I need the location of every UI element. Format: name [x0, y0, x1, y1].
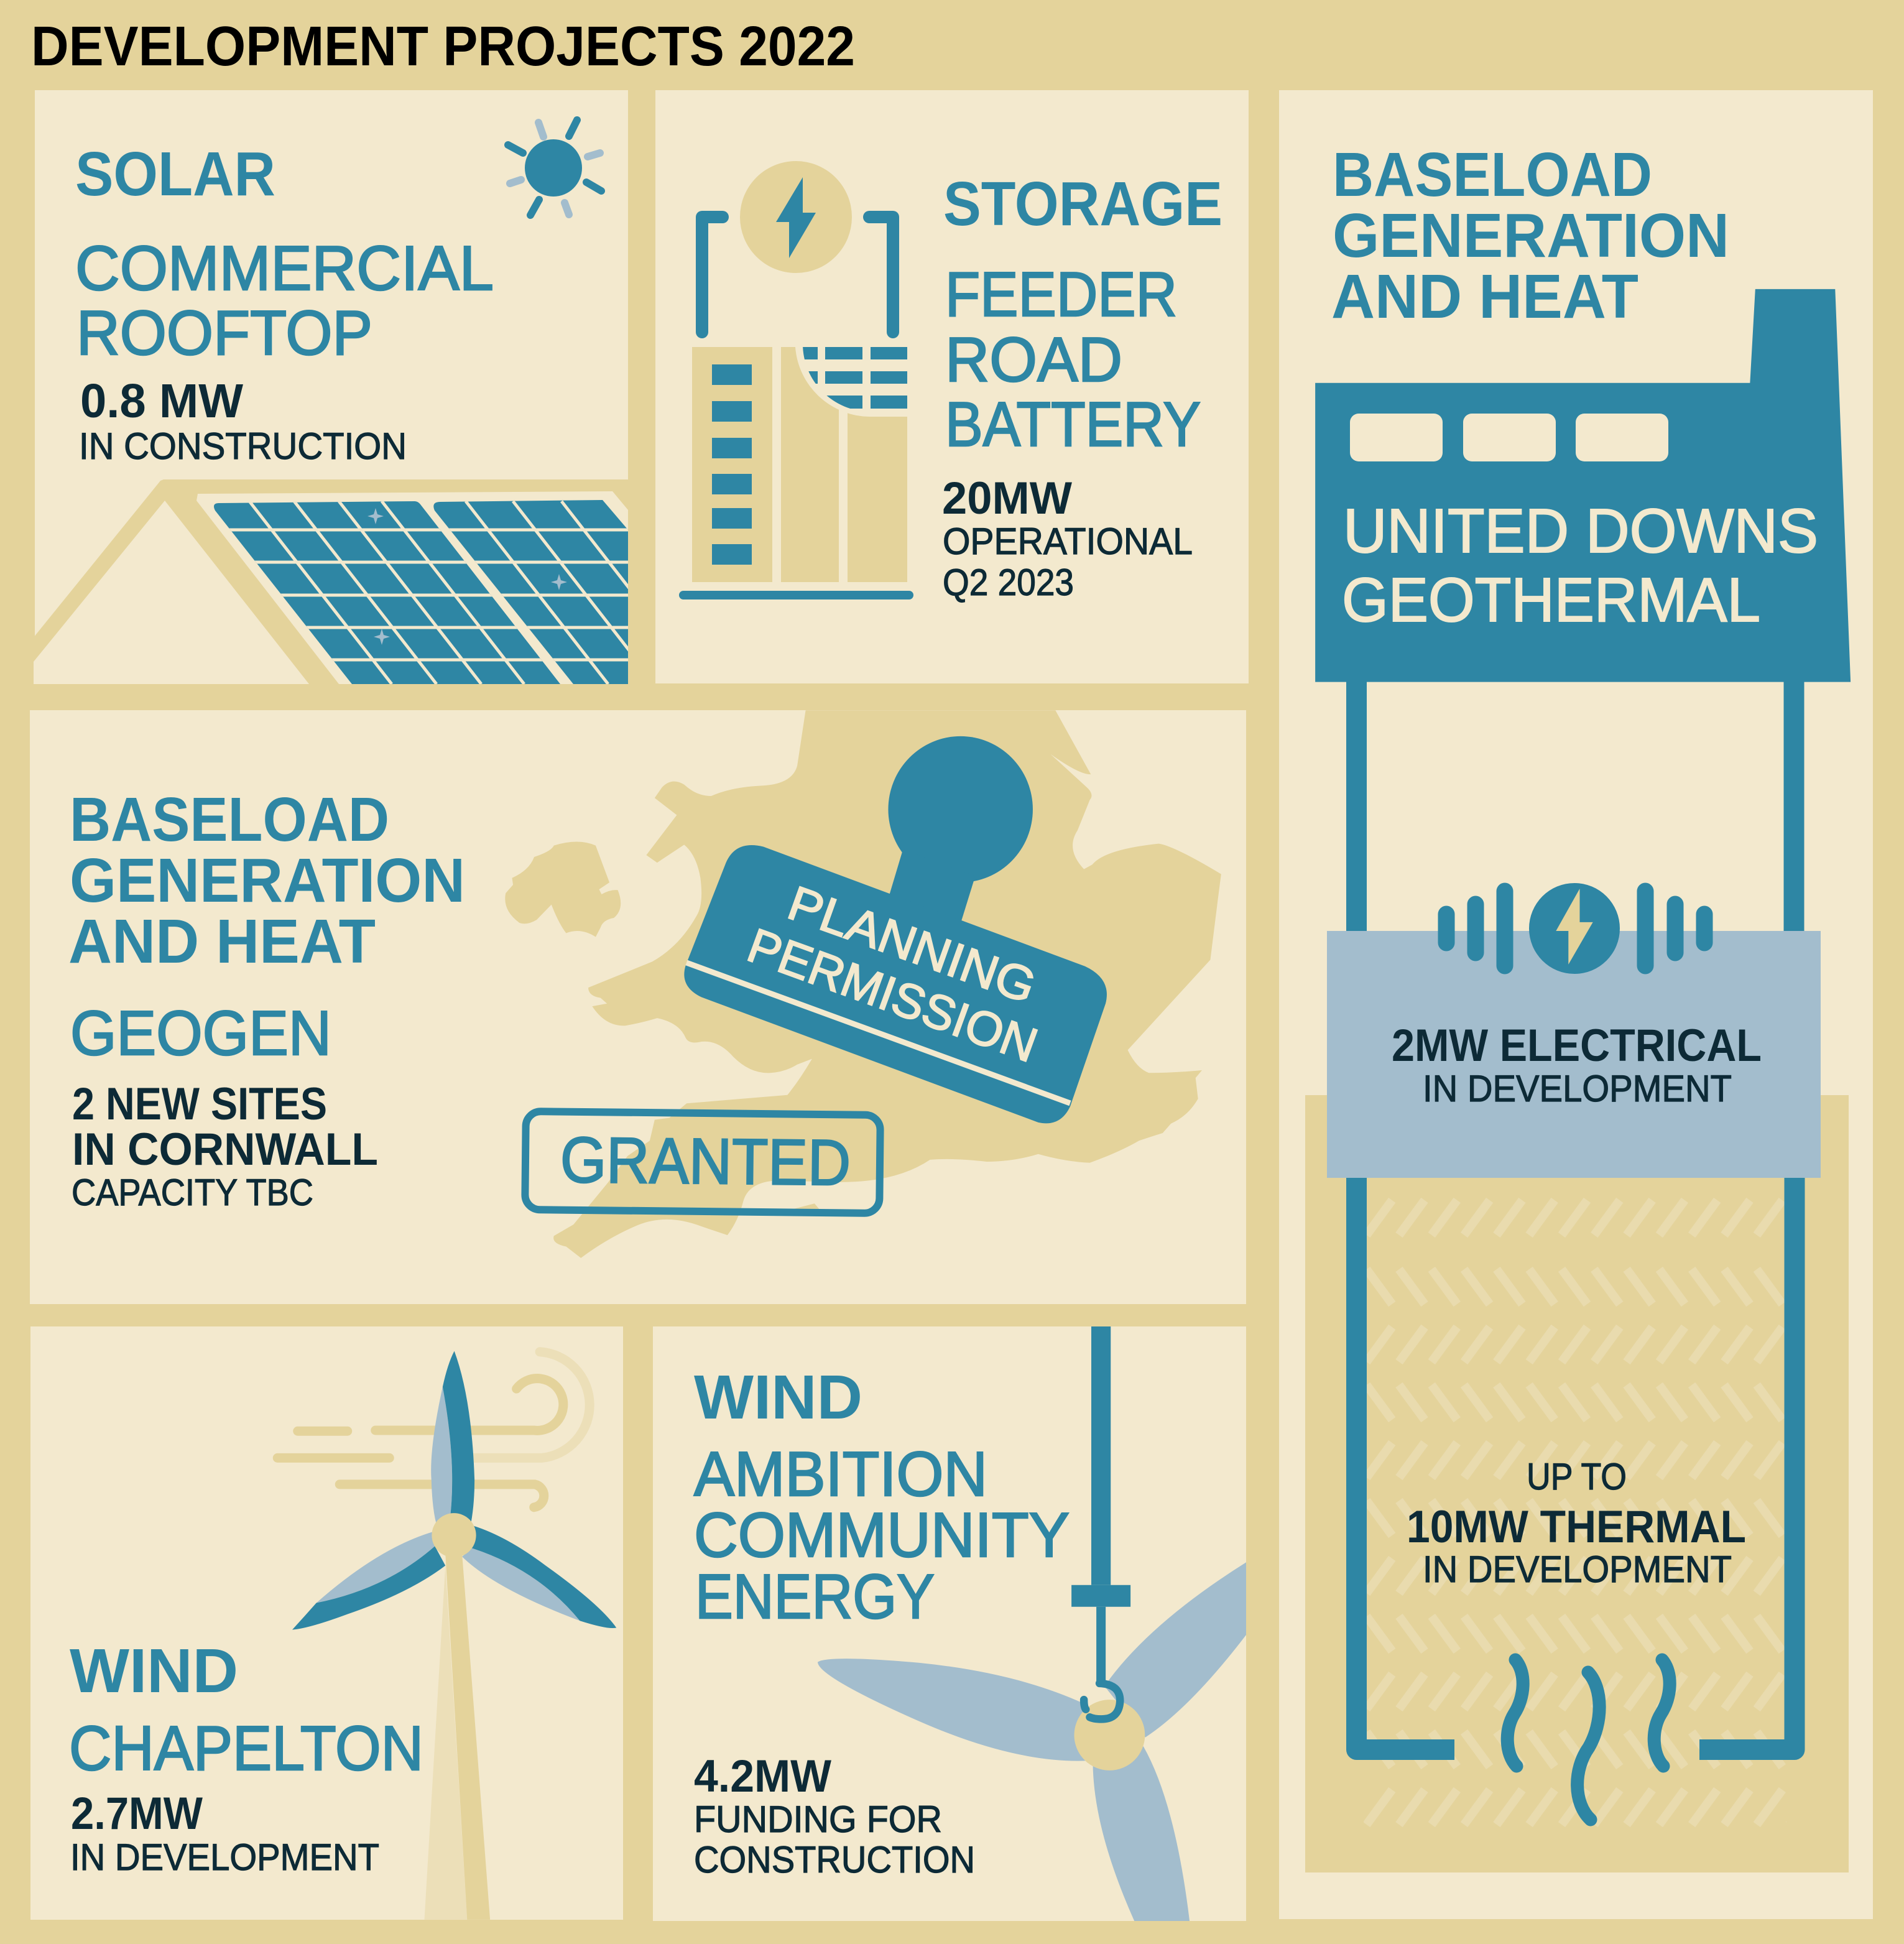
- icon: rubber stamp: PERMISSION: [741, 917, 1045, 1073]
- project name: ambition community energy: [694, 1440, 1070, 1632]
- title: DEVELOPMENT PROJECTS 2022: [31, 16, 855, 78]
- heading: baseload generation and heat: [68, 785, 465, 976]
- thermal text: [1407, 1456, 1746, 1590]
- project name: feeder road battery: BATTERY: [945, 390, 1201, 460]
- project name: ambition community energy: ENERGY: [695, 1562, 935, 1632]
- icon: sun: [508, 120, 601, 215]
- status: in construction: IN CONSTRUCTION: [79, 425, 407, 467]
- factory building: [1315, 289, 1851, 682]
- icon: rubber stamp: [684, 736, 1107, 1123]
- illustration: wind turbine with gusts: [277, 1351, 616, 1920]
- project name: commercial rooftop: COMMERCIAL: [75, 234, 494, 303]
- heading: storage: STORAGE: [943, 169, 1222, 239]
- capacity: 2.7MW: 2.7MW: [71, 1789, 203, 1839]
- project name: feeder road battery: FEEDER: [945, 260, 1177, 330]
- status: operational Q2 2023: [943, 521, 1193, 603]
- heading: baseload generation and heat: AND HEAT: [68, 907, 376, 976]
- project name: geogen: GEOGEN: [70, 999, 331, 1068]
- capacity: 0.8 MW: 0.8 MW: [80, 374, 243, 428]
- electrical output box: [1327, 931, 1821, 1178]
- capacity: 2 new sites in Cornwall: IN CORNWALL: [72, 1124, 378, 1175]
- icon: battery with bolt: [683, 161, 909, 595]
- status: in development: IN DEVELOPMENT: [1423, 1068, 1732, 1109]
- panel: baseload generation and heat, United Downs: [1279, 90, 1873, 1919]
- panel: geogen planning permission: [30, 710, 1246, 1304]
- heading: baseload generation and heat: GENERATION: [1333, 201, 1729, 271]
- icon: rubber stamp: PLANNING: [781, 875, 1043, 1014]
- heading: wind: WIND: [70, 1636, 238, 1706]
- thermal text: UP TO: [1527, 1456, 1627, 1497]
- icon: heat waves: [1507, 1660, 1670, 1820]
- capacity: 2 new sites in Cornwall: 2 NEW SITES: [72, 1079, 327, 1129]
- panel: solar: [34, 90, 628, 684]
- factory building: UNITED DOWNS: [1343, 496, 1818, 566]
- thermal text: IN DEVELOPMENT: [1423, 1548, 1732, 1590]
- icon: power signal: [1446, 883, 1704, 974]
- status: funding for construction: CONSTRUCTION: [694, 1839, 975, 1881]
- capacity: 4.2MW: 4.2MW: [694, 1751, 831, 1802]
- capacity: 2 new sites in Cornwall: [72, 1079, 378, 1175]
- project name: ambition community energy: AMBITION: [694, 1440, 987, 1509]
- project name: feeder road battery: ROAD: [945, 325, 1122, 395]
- thermal text: 10MW THERMAL: [1407, 1502, 1746, 1552]
- capacity: 2MW electrical: 2MW ELECTRICAL: [1392, 1021, 1762, 1071]
- ground texture: [1364, 1195, 1786, 1827]
- heading: baseload generation and heat: BASELOAD: [70, 785, 389, 854]
- status: operational Q2 2023: OPERATIONAL: [943, 521, 1193, 562]
- project name: commercial rooftop: [75, 234, 494, 368]
- ground block: [1305, 1095, 1849, 1872]
- panel: storage: [655, 90, 1249, 683]
- status: operational Q2 2023: Q2 2023: [943, 562, 1074, 603]
- project name: Chapelton: CHAPELTON: [69, 1714, 423, 1784]
- heading: solar: SOLAR: [75, 139, 275, 209]
- stamp mark: granted: GRANTED: [560, 1124, 851, 1199]
- map of Great Britain and Ireland: [505, 710, 1221, 1258]
- panel: wind Chapelton: [30, 1326, 623, 1920]
- heading: baseload generation and heat: GENERATION: [70, 846, 465, 915]
- project name: ambition community energy: COMMUNITY: [694, 1501, 1070, 1570]
- status: funding for construction: FUNDING FOR: [694, 1798, 942, 1840]
- heading: baseload generation and heat: AND HEAT: [1331, 262, 1638, 331]
- project name: feeder road battery: [945, 260, 1201, 460]
- capacity: 20MW: 20MW: [942, 473, 1072, 524]
- heading: baseload generation and heat: BASELOAD: [1333, 140, 1652, 210]
- illustration: roof with solar panels: [34, 479, 628, 684]
- heading: baseload generation and heat: [1331, 140, 1729, 331]
- heading: wind: WIND: [694, 1363, 862, 1432]
- stamp mark: granted: [525, 1111, 880, 1213]
- status: capacity TBC: CAPACITY TBC: [72, 1172, 313, 1213]
- status: in development: IN DEVELOPMENT: [70, 1836, 379, 1878]
- project name: commercial rooftop: ROOFTOP: [76, 299, 372, 368]
- panel: wind Ambition Community Energy: [653, 1326, 1247, 1921]
- illustration: crane lifting turbine: [818, 1326, 1247, 1921]
- factory building: GEOTHERMAL: [1342, 565, 1760, 635]
- status: funding for construction: [694, 1798, 975, 1881]
- pipes: [1357, 678, 1795, 1750]
